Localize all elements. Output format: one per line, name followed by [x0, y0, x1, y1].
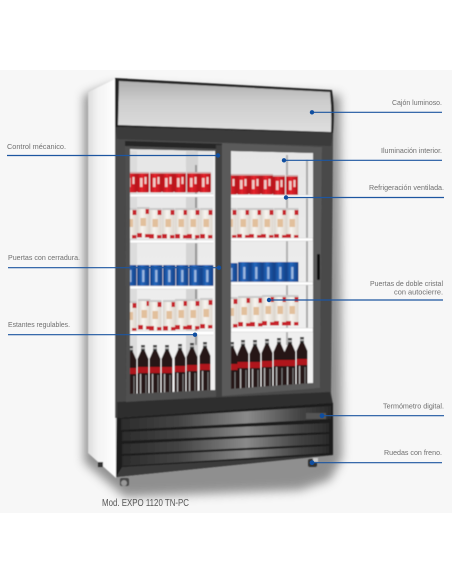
- callout: puertas de doble cristal: [267, 279, 443, 302]
- callout: termómetro digital: Termómetro digital.: [383, 402, 444, 410]
- center post: [216, 145, 222, 397]
- background: [0, 70, 452, 513]
- callout: puertas con cerradura: [8, 253, 221, 270]
- cans row 4: [124, 298, 212, 332]
- left door frame: [125, 146, 221, 402]
- wheels: [98, 458, 318, 486]
- right glass: [224, 151, 313, 392]
- callout: puertas de doble cristal: Puertas de doble cristal: [370, 279, 443, 288]
- callout: estantes regulables: [8, 320, 197, 337]
- callout: refrigeración ventilada: [284, 183, 444, 200]
- thermometer display: [306, 413, 326, 419]
- callout: puertas de doble cristal: con autocierre.: [394, 288, 443, 296]
- right bottles: [226, 337, 308, 392]
- callout: cajón luminoso: Cajón luminoso.: [392, 98, 442, 107]
- fridge shadow: [84, 85, 342, 497]
- door handle: [317, 254, 320, 280]
- callout: iluminación interior: [282, 146, 442, 162]
- left shelves: [130, 194, 215, 335]
- cans row 1: [125, 172, 211, 192]
- right cans row 3: [225, 262, 298, 284]
- light box: [115, 78, 334, 133]
- callout: refrigeración ventilada: Refrigeración ventilada.: [369, 183, 444, 192]
- callout: control mecánico: [7, 142, 220, 158]
- callout: cajón luminoso: [310, 98, 442, 115]
- right shelves: [231, 195, 313, 332]
- right cans row 4: [225, 295, 298, 328]
- infographic: [7, 74, 444, 508]
- callout: puertas con cerradura: Puertas con cerradura.: [8, 253, 80, 262]
- inner door shadow: [125, 141, 322, 399]
- side panel: [88, 79, 116, 478]
- callout: control mecánico: Control mécanico.: [7, 142, 66, 151]
- refrigerator: [88, 78, 334, 486]
- right cans row 1: [225, 174, 298, 196]
- model name: Mod. EXPO 1120 TN-PC: [102, 498, 189, 509]
- door frame: [115, 127, 333, 418]
- callout: iluminación interior: Iluminación interior.: [381, 146, 442, 155]
- right cans row 2: [224, 208, 298, 238]
- right door frame: [222, 143, 322, 396]
- callout: ruedas con freno: [310, 448, 442, 465]
- callout: termómetro digital: [320, 402, 444, 418]
- cans row 3: [124, 265, 214, 286]
- callout: ruedas con freno: Ruedas con freno.: [384, 448, 442, 457]
- bottles: [126, 342, 210, 396]
- left glass: [124, 149, 216, 396]
- callout: estantes regulables: Estantes regulables.: [8, 320, 70, 329]
- base grille: [116, 403, 333, 477]
- cans row 2: [124, 207, 212, 238]
